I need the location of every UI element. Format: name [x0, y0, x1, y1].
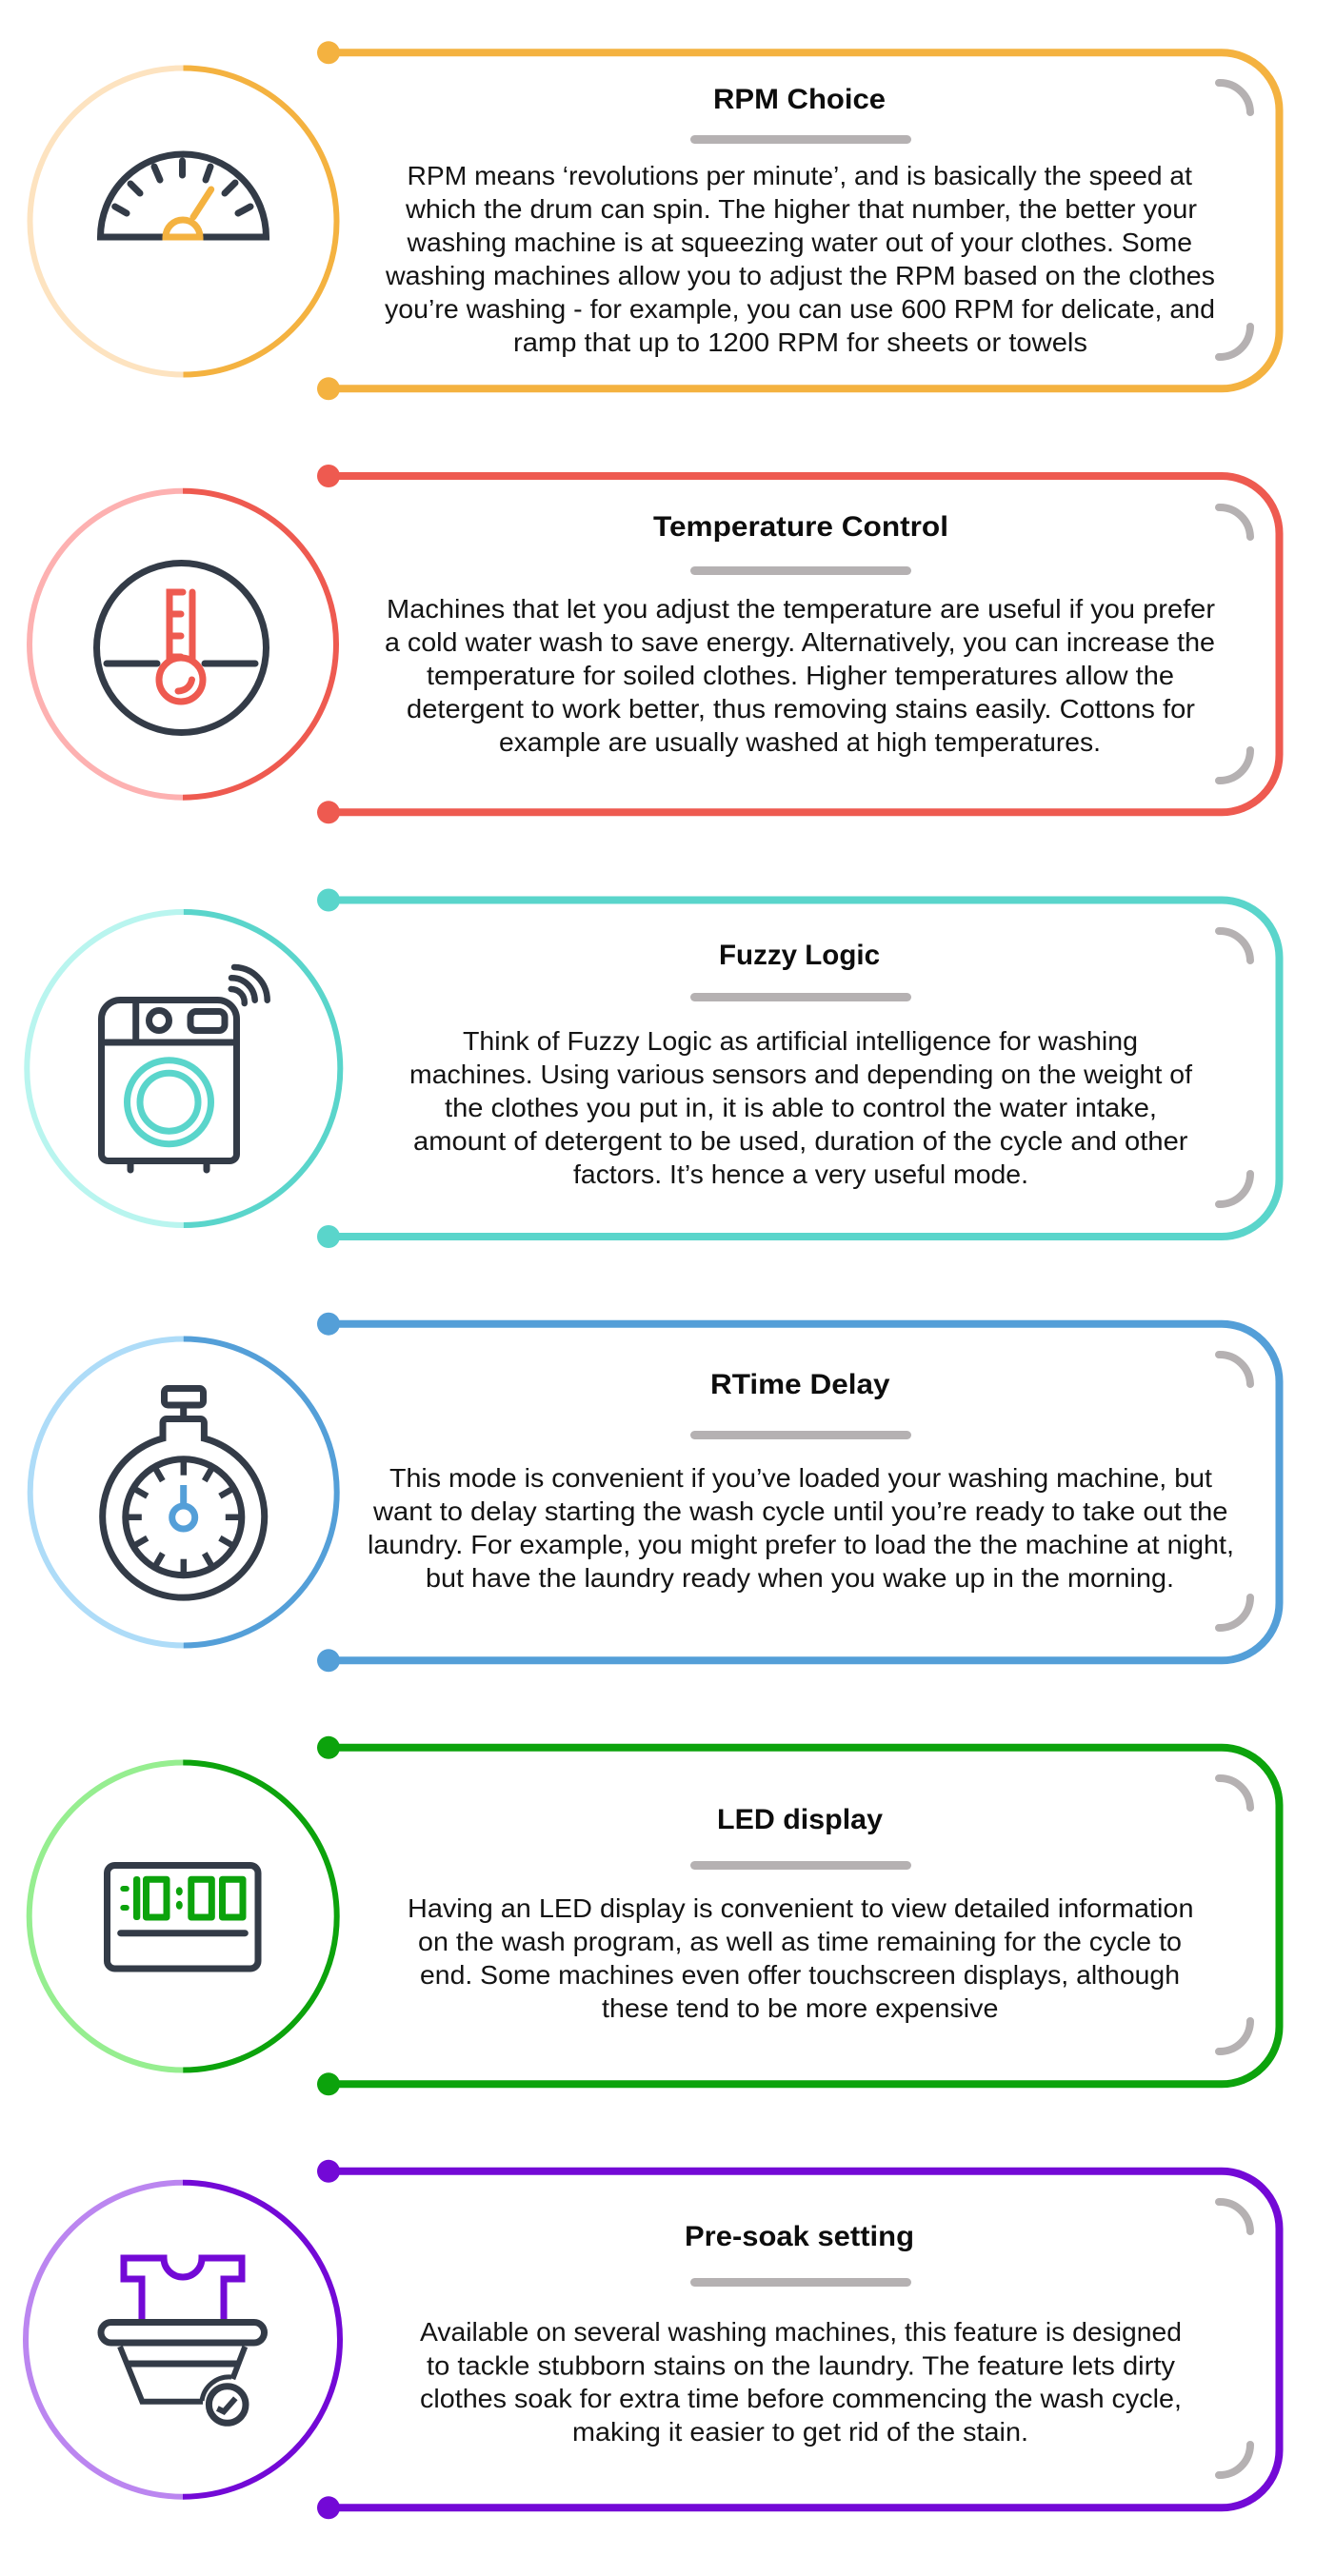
body text: LED display: these tend to be more expensive — [602, 1993, 998, 2023]
card frame: Fuzzy Logic — [317, 889, 1280, 1248]
heading: RPM Choice: RPM Choice — [713, 84, 886, 115]
body text: RTime Delay: This mode is convenient if you’ve loaded your washing machine, but — [389, 1463, 1212, 1493]
ring: Pre-soak setting — [26, 2183, 340, 2497]
body text: Fuzzy Logic — [409, 1026, 1192, 1189]
ring: Fuzzy Logic — [27, 912, 340, 1225]
body text: RTime Delay: laundry. For example, you might prefer to load the the machine at night, — [368, 1530, 1234, 1559]
icon: LED clock display — [107, 1866, 258, 1969]
panel: RTime Delay — [30, 1313, 1280, 1672]
ring: Temperature Control — [30, 491, 336, 798]
heading rule — [690, 135, 911, 144]
ring: LED display — [30, 1763, 337, 2070]
body text: RPM Choice — [385, 161, 1215, 357]
body text: Temperature Control: detergent to work better, thus removing stains easily. Cottons for — [407, 694, 1195, 723]
heading: RTime Delay: RTime Delay — [710, 1369, 890, 1400]
heading rule — [690, 1861, 911, 1870]
panel: Fuzzy Logic — [27, 889, 1279, 1248]
heading: LED display: LED display — [717, 1804, 883, 1835]
heading: Fuzzy Logic: Fuzzy Logic — [719, 940, 880, 971]
body text: LED display: on the wash program, as well as time remaining for the cycle to — [418, 1927, 1182, 1956]
panel: LED display — [30, 1736, 1280, 2095]
body text: Temperature Control — [385, 594, 1215, 757]
body text: Fuzzy Logic: machines. Using various sensors and depending on the weight of — [409, 1060, 1192, 1089]
body text: LED display: Having an LED display is convenient to view detailed information — [408, 1893, 1194, 1923]
body text: Fuzzy Logic: factors. It’s hence a very useful mode. — [573, 1159, 1028, 1189]
ring: RPM Choice — [30, 69, 337, 375]
icon: laundry basket with shirt — [101, 2258, 265, 2423]
body text: Fuzzy Logic: the clothes you put in, it is able to control the water intake, — [445, 1093, 1157, 1122]
body text: RPM Choice: ramp that up to 1200 RPM for sheets or towels — [513, 327, 1087, 357]
body text: Pre-soak setting: to tackle stubborn stains on the laundry. The feature lets dirty — [427, 2351, 1175, 2380]
body text: Fuzzy Logic: amount of detergent to be used, duration of the cycle and other — [413, 1126, 1188, 1156]
body text: Pre-soak setting: clothes soak for extra time before commencing the wash cycle, — [420, 2384, 1182, 2413]
heading rule — [690, 2278, 911, 2287]
body text: LED display: end. Some machines even offer touchscreen displays, although — [420, 1960, 1180, 1990]
card frame: RTime Delay — [317, 1313, 1280, 1672]
heading: Temperature Control: Temperature Control — [653, 511, 948, 543]
heading rule — [690, 993, 911, 1001]
panel: Pre-soak setting — [26, 2160, 1279, 2519]
ring: RTime Delay — [30, 1338, 337, 1645]
body text: Pre-soak setting: making it easier to get rid of the stain. — [572, 2417, 1028, 2447]
body text: RTime Delay — [368, 1463, 1234, 1593]
body text: RPM Choice: RPM means ‘revolutions per minute’, and is basically the speed at — [408, 161, 1192, 190]
heading rule — [690, 1431, 911, 1439]
body text: Temperature Control: a cold water wash to save energy. Alternatively, you can increase the — [385, 627, 1215, 657]
body text: Pre-soak setting: Available on several washing machines, this feature is designed — [420, 2317, 1182, 2347]
body text: RPM Choice: washing machines allow you to adjust the RPM based on the clothes — [385, 261, 1215, 290]
body text: Pre-soak setting — [420, 2317, 1182, 2447]
body text: LED display — [408, 1893, 1194, 2023]
heading: Pre-soak setting: Pre-soak setting — [685, 2221, 914, 2252]
body text: RTime Delay: but have the laundry ready when you wake up in the morning. — [426, 1563, 1174, 1593]
body text: RPM Choice: you’re washing - for example, you can use 600 RPM for delicate, and — [385, 294, 1215, 324]
heading rule — [690, 566, 911, 575]
body text: RTime Delay: want to delay starting the wash cycle until you’re ready to take out the — [372, 1496, 1228, 1526]
body text: RPM Choice: washing machine is at squeezing water out of your clothes. Some — [406, 228, 1192, 257]
body text: RPM Choice: which the drum can spin. The higher that number, the better your — [405, 194, 1197, 224]
icon: speedometer gauge — [101, 154, 267, 237]
body text: Temperature Control: temperature for soiled clothes. Higher temperatures allow the — [427, 661, 1174, 690]
card frame: Pre-soak setting — [317, 2160, 1280, 2519]
body text: Temperature Control: Machines that let you adjust the temperature are useful if you prefer — [387, 594, 1215, 624]
icon: thermometer in dial — [97, 564, 267, 733]
body text: Temperature Control: example are usually washed at high temperatures. — [499, 727, 1101, 757]
panel: RPM Choice — [30, 41, 1280, 400]
panel: Temperature Control — [30, 465, 1280, 823]
card frame: Temperature Control — [317, 465, 1280, 823]
icon: smart washing machine — [101, 967, 268, 1170]
card frame: LED display — [317, 1736, 1280, 2095]
icon: stopwatch — [103, 1388, 265, 1597]
card frame: RPM Choice — [317, 41, 1280, 400]
body text: Fuzzy Logic: Think of Fuzzy Logic as artificial intelligence for washing — [463, 1026, 1138, 1056]
